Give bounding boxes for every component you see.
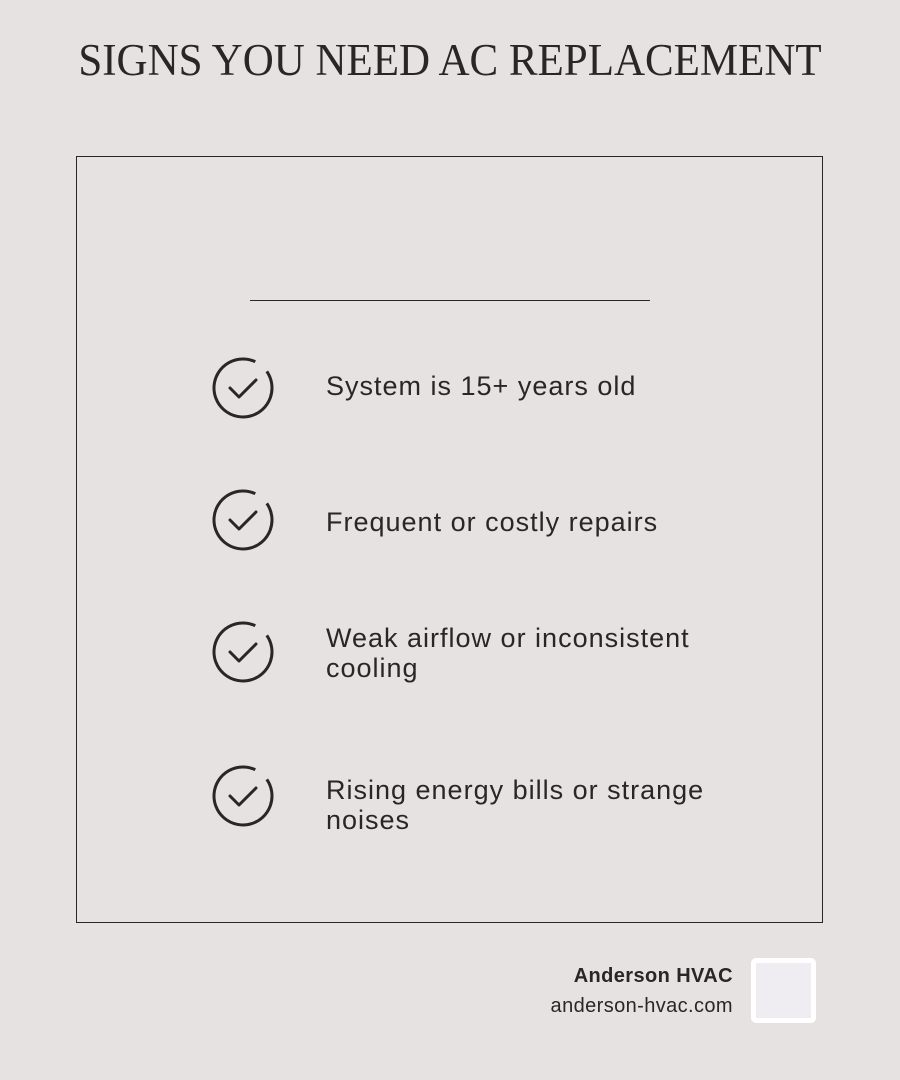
item 3: Weak airflow or inconsistent	[326, 623, 690, 653]
brand text: anderson-hvac.com	[551, 995, 733, 1017]
item 3	[212, 622, 690, 683]
item 1: System is 15+ years old	[326, 371, 636, 401]
panel: signs list	[76, 156, 823, 923]
brand text: Anderson HVAC	[574, 965, 733, 987]
brand text	[551, 965, 733, 1017]
item 2: Frequent or costly repairs	[326, 507, 658, 537]
item 1	[212, 358, 636, 418]
item 4: Rising energy bills or strange	[326, 775, 704, 805]
item 4	[212, 766, 704, 835]
title: SIGNS YOU NEED AC REPLACEMENT	[78, 35, 822, 85]
logo	[751, 958, 816, 1023]
item 2	[212, 490, 658, 550]
item 3: cooling	[326, 653, 419, 683]
divider rule	[250, 300, 650, 301]
item 4: noises	[326, 805, 410, 835]
